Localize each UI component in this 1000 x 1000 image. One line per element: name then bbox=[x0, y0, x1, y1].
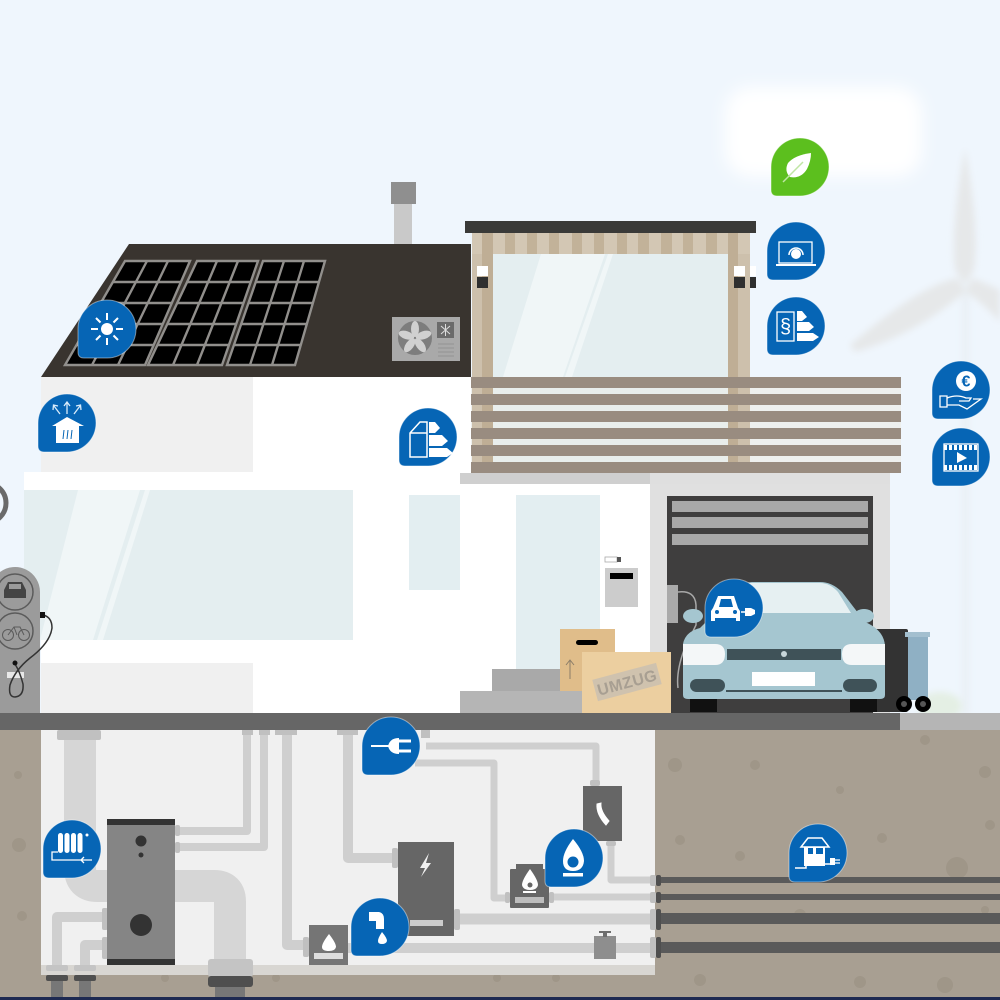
icon: euro hand: € bbox=[962, 374, 971, 390]
icon: house heat loss bbox=[38, 394, 96, 452]
mailbox bbox=[605, 557, 638, 607]
electricity box bbox=[398, 842, 454, 936]
icon: energy certificate bbox=[399, 408, 457, 466]
small window bbox=[409, 495, 460, 590]
floor drains and stubs bbox=[46, 959, 253, 997]
icon: legal energy label: § bbox=[780, 316, 791, 338]
roof bbox=[41, 244, 471, 377]
box with label: UMZUG bbox=[596, 667, 659, 700]
icon: gas flame bbox=[545, 829, 603, 887]
wind turbine bbox=[850, 148, 1000, 715]
sky background bbox=[0, 0, 1000, 730]
steps bbox=[460, 669, 582, 713]
air conditioning unit bbox=[392, 317, 460, 361]
underground supply lines bbox=[655, 877, 1000, 953]
solar panel 2 bbox=[148, 261, 258, 365]
icon: house connection bbox=[789, 824, 847, 882]
garage bbox=[650, 484, 890, 713]
bush bbox=[918, 692, 962, 720]
bottom edge bbox=[0, 997, 1000, 1000]
telephone box bbox=[583, 786, 622, 841]
wall charger and cable bbox=[667, 585, 696, 688]
icon: green leaf bbox=[771, 138, 829, 196]
upper loggia: window, frame and beam bbox=[465, 221, 756, 378]
solar panels bbox=[65, 261, 325, 365]
car bbox=[683, 582, 885, 712]
basement room bbox=[41, 730, 655, 975]
water meter bbox=[309, 925, 348, 965]
ground floor wall bbox=[24, 472, 650, 713]
icon: laptop support bbox=[767, 222, 825, 280]
pipe caps and connectors bbox=[57, 730, 656, 959]
gas meter bbox=[510, 864, 549, 908]
icon: film strip bbox=[932, 428, 990, 486]
waste bins bbox=[875, 629, 931, 712]
icon: solar sun bbox=[78, 300, 136, 358]
icon: electric car bbox=[705, 579, 763, 637]
icon: radiator heating bbox=[43, 820, 101, 878]
shutoff valve bbox=[594, 931, 616, 959]
chimney bbox=[391, 182, 416, 245]
solar panel 1 bbox=[65, 261, 190, 365]
upper floor wall bbox=[41, 377, 471, 477]
charging station bbox=[0, 567, 52, 713]
icon: electricity plug bbox=[362, 717, 420, 775]
wall lights bbox=[477, 266, 756, 288]
balcony railing bbox=[471, 377, 901, 473]
large window bbox=[24, 490, 353, 640]
porch canopy bbox=[460, 473, 890, 484]
cloud bbox=[725, 87, 922, 177]
front door bbox=[516, 495, 600, 713]
icon: water tap bbox=[351, 898, 409, 956]
icon: legal energy label bbox=[767, 297, 825, 355]
icon: euro hand bbox=[932, 361, 990, 419]
basement pipes bbox=[57, 733, 655, 965]
box with arrow bbox=[560, 629, 615, 691]
solar panel 3 bbox=[227, 261, 325, 365]
soil bbox=[0, 730, 1000, 997]
moving boxes bbox=[560, 629, 671, 713]
ground slab bbox=[0, 713, 1000, 730]
ring symbol at left edge bbox=[0, 483, 6, 523]
boiler bbox=[107, 819, 175, 965]
